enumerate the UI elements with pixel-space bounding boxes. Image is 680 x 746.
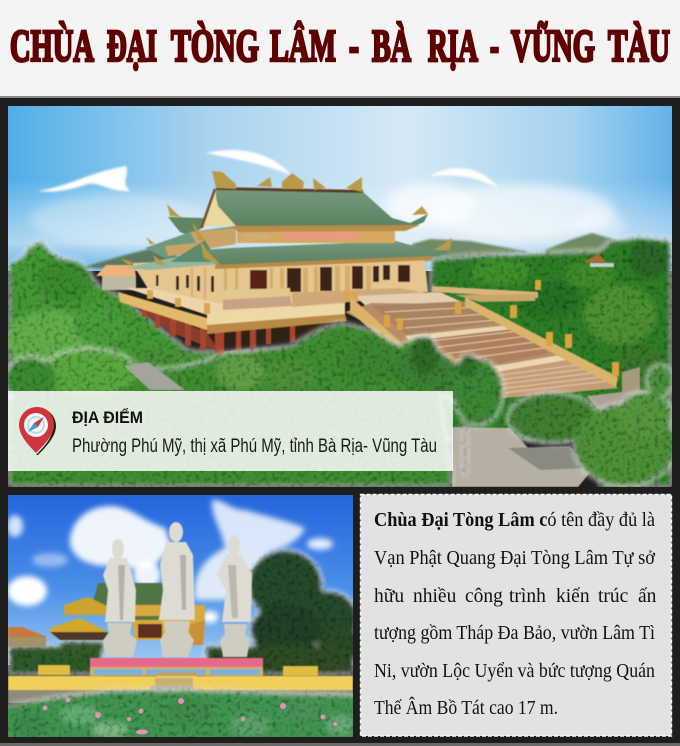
sky [8, 495, 353, 665]
left wing roofs [126, 256, 216, 270]
description paragraph: trình [509, 586, 546, 607]
gravel path [124, 362, 185, 390]
stair rails [465, 297, 618, 387]
roof ornaments [120, 171, 452, 266]
statue left [103, 539, 137, 657]
forest background [5, 236, 672, 487]
lower roof [202, 239, 452, 266]
title: - [490, 21, 499, 71]
yellow wall [8, 676, 353, 703]
title: TÒNG [171, 21, 259, 71]
description paragraph: hữu [374, 586, 404, 607]
panel: location callout [8, 391, 453, 471]
description paragraph [374, 510, 657, 719]
icon: location pin with compass [19, 407, 56, 455]
description paragraph: ấn [638, 586, 657, 607]
statue center [159, 522, 195, 657]
title: CHÙA [10, 21, 94, 71]
gable [204, 193, 236, 227]
description paragraph: Ni, vườn Lộc Uyển và bức tượng Quán [374, 661, 655, 682]
title: ĐẠI [107, 21, 157, 71]
gravel terrace and courtyard [452, 390, 660, 487]
staircase [345, 280, 640, 398]
statue right [217, 535, 252, 657]
title: RỊA [428, 21, 478, 71]
heading: location: ĐỊA ĐIỂM [72, 408, 143, 427]
description paragraph: trúc [598, 586, 629, 607]
panel: main temple photo [4, 106, 677, 487]
lotus pond [8, 685, 353, 737]
sky with clouds [8, 106, 672, 271]
main building walls [132, 260, 428, 305]
description paragraph: Vạn Phật Quang Đại Tòng Lâm Tự sở [374, 548, 656, 569]
upper roof [216, 188, 428, 229]
temple [118, 171, 462, 354]
title: - [349, 21, 359, 71]
panel: description text [360, 494, 672, 736]
foreground trees [4, 322, 677, 487]
description paragraph: Thế Âm Bồ Tát cao 17 m. [374, 697, 558, 719]
description paragraph: công [465, 586, 503, 607]
three white statues [103, 522, 252, 657]
title [10, 21, 670, 71]
mountains [80, 233, 620, 268]
description paragraph: nhiều [413, 586, 457, 607]
panel: statues photo [0, 495, 362, 745]
terrace underside and red pillars [180, 321, 345, 352]
terrace floor and balustrades [126, 288, 355, 315]
title: LÂM [270, 21, 336, 71]
pink platform [37, 657, 319, 677]
description paragraph: tượng gồm Tháp Đa Bảo, vườn Lâm Tì [374, 623, 656, 644]
location address: Phường Phú Mỹ, thị xã Phú Mỹ, tỉnh Bà Rịa- Vũng Tàu [72, 436, 437, 457]
description paragraph: Chùa Đại Tòng Lâm có tên đầy đủ là [374, 510, 655, 531]
title: VŨNG [511, 21, 595, 71]
description paragraph: kiến [556, 586, 590, 607]
header background [0, 0, 680, 97]
clouds [7, 500, 333, 623]
temple behind statues [8, 583, 205, 647]
upper wall with sign [236, 230, 396, 244]
tree [8, 549, 362, 675]
lotus flowers [42, 698, 337, 734]
balustrade urns [147, 290, 358, 314]
title: BÀ [372, 21, 411, 71]
distant orange building [96, 254, 614, 290]
